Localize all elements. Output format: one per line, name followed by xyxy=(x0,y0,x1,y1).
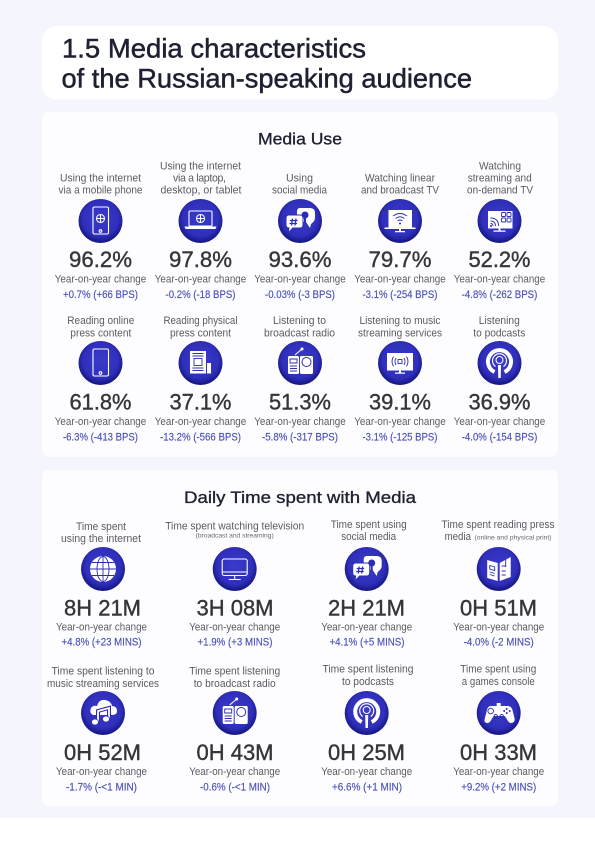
label: Reading online xyxy=(67,315,134,327)
value: 0H 43M xyxy=(196,740,274,765)
year-on-year label: Year-on-year change xyxy=(354,416,446,428)
stat: podcasts xyxy=(454,315,545,444)
change: +9.2% (+2 MINS) xyxy=(461,782,536,794)
icon: chat bubbles xyxy=(278,199,322,243)
value: 3H 08M xyxy=(196,595,274,620)
label xyxy=(264,315,335,340)
stat: laptop internet xyxy=(155,160,246,301)
label: streaming services xyxy=(358,328,442,340)
label: on-demand TV xyxy=(467,184,534,196)
label: Using the internet xyxy=(60,172,141,184)
year-on-year label: Year-on-year change xyxy=(55,274,146,286)
label xyxy=(160,160,242,196)
year-on-year label: Year-on-year change xyxy=(189,622,280,634)
label: Time spent using xyxy=(460,664,536,676)
label: Time spent listening xyxy=(322,664,414,676)
icon: radio xyxy=(213,691,257,735)
label: to podcasts xyxy=(342,676,394,688)
label xyxy=(61,521,141,545)
icon: podcast xyxy=(478,341,522,385)
label: Time spent xyxy=(76,521,126,533)
label xyxy=(331,519,407,543)
label xyxy=(58,172,143,196)
value: 51.3% xyxy=(269,390,331,414)
year-on-year label: Year-on-year change xyxy=(254,274,346,286)
year-on-year label: Year-on-year change xyxy=(321,766,412,778)
panel: daily time spent xyxy=(42,470,558,806)
label: Using the internet xyxy=(160,160,241,172)
change: -4.0% (-2 MINS) xyxy=(464,637,534,649)
value: 0H 51M xyxy=(460,595,537,620)
label xyxy=(272,172,327,196)
year-on-year label: Year-on-year change xyxy=(155,416,246,428)
year-on-year label: Year-on-year change xyxy=(354,274,446,286)
value: 93.6% xyxy=(268,247,332,272)
stat: time games console xyxy=(453,664,544,794)
label xyxy=(473,315,525,340)
label: broadcast radio xyxy=(264,328,335,340)
value: 61.8% xyxy=(70,390,132,414)
change: +0.7% (+66 BPS) xyxy=(63,289,138,301)
change: -5.8% (-317 BPS) xyxy=(262,432,338,444)
stat: time using internet xyxy=(56,521,147,649)
value: 52.2% xyxy=(468,247,530,272)
label: via a laptop, xyxy=(173,172,226,184)
value: 8H 21M xyxy=(64,595,141,620)
year-on-year label: Year-on-year change xyxy=(453,766,544,778)
label: Watching linear xyxy=(365,172,435,184)
icon: gamepad xyxy=(477,691,521,735)
label xyxy=(47,666,159,690)
heading: daily time spent: Daily Time spent with Media xyxy=(184,488,417,507)
label: streaming and xyxy=(468,172,532,184)
label: Using xyxy=(286,172,313,184)
year-on-year label: Year-on-year change xyxy=(155,274,246,286)
year-on-year label: Year-on-year change xyxy=(56,622,147,634)
label xyxy=(361,172,440,196)
label xyxy=(67,315,134,340)
label xyxy=(189,666,280,690)
heading: media use: Media Use xyxy=(258,130,342,149)
stat: time reading press xyxy=(442,519,554,649)
panel: media use xyxy=(42,112,558,457)
change: -0.6% (-<1 MIN) xyxy=(200,782,270,794)
icon: streaming tv xyxy=(478,199,522,243)
change: -13.2% (-566 BPS) xyxy=(160,432,241,444)
label: via a mobile phone xyxy=(58,184,143,196)
change: -0.2% (-18 BPS) xyxy=(166,289,236,301)
stat: linear tv xyxy=(354,172,446,301)
value: 0H 25M xyxy=(328,740,405,765)
icon: tv with wifi xyxy=(378,199,422,243)
stat: time watching television xyxy=(165,520,304,649)
stat: online press xyxy=(55,315,146,444)
icon: newspaper xyxy=(178,341,222,385)
value: 36.9% xyxy=(468,390,530,414)
title xyxy=(62,34,472,94)
icon: phone xyxy=(78,341,122,385)
label: Time spent reading press xyxy=(442,519,554,531)
stat: broadcast radio xyxy=(254,315,346,444)
label: Reading physical xyxy=(164,315,238,327)
label: a games console xyxy=(462,676,535,688)
change: -6.3% (-413 BPS) xyxy=(63,432,138,444)
icon: globe xyxy=(81,547,125,591)
value: 2H 21M xyxy=(328,595,405,620)
label: music streaming services xyxy=(47,678,159,690)
label xyxy=(460,664,536,688)
value: 79.7% xyxy=(368,247,432,272)
change: -1.7% (-<1 MIN) xyxy=(66,782,137,794)
label: press content xyxy=(70,328,131,340)
label: to broadcast radio xyxy=(194,678,276,690)
year-on-year label: Year-on-year change xyxy=(454,416,545,428)
value: 0H 33M xyxy=(460,740,537,765)
year-on-year label: Year-on-year change xyxy=(56,766,147,778)
label: Time spent listening xyxy=(189,666,280,678)
label xyxy=(165,520,304,540)
label: using the internet xyxy=(61,533,141,545)
title: 1.5 Media characteristics xyxy=(62,34,366,64)
label: Watching xyxy=(479,160,521,172)
label: Listening to music xyxy=(360,315,441,327)
label: social media xyxy=(341,531,396,543)
label: Time spent using xyxy=(331,519,407,531)
label xyxy=(467,160,534,196)
label: press content xyxy=(170,328,231,340)
change: -4.8% (-262 BPS) xyxy=(462,289,537,301)
icon: laptop with globe xyxy=(178,199,222,243)
label: desktop, or tablet xyxy=(160,184,242,196)
icon: open book xyxy=(477,547,521,591)
value: 39.1% xyxy=(369,390,431,414)
label xyxy=(164,315,238,340)
icon: monitor xyxy=(213,547,257,591)
label: media xyxy=(445,531,471,543)
change: +1.9% (+3 MINS) xyxy=(198,637,272,649)
stat: streaming tv xyxy=(454,160,545,301)
change: +4.1% (+5 MINS) xyxy=(330,637,404,649)
label: Time spent watching television xyxy=(165,520,304,532)
year-on-year label: Year-on-year change xyxy=(55,416,146,428)
stat: mobile internet xyxy=(55,172,146,301)
label: and broadcast TV xyxy=(361,184,440,196)
year-on-year label: Year-on-year change xyxy=(454,274,545,286)
label: Listening to xyxy=(273,315,326,327)
change: -0.03% (-3 BPS) xyxy=(265,289,335,301)
icon: radio xyxy=(278,341,322,385)
stat: time using social media xyxy=(321,519,412,649)
label: Time spent listening to xyxy=(52,666,155,678)
value: 97.8% xyxy=(169,247,232,272)
stat: music streaming xyxy=(354,315,446,444)
stat: physical press xyxy=(155,315,246,444)
label: (broadcast and streaming) xyxy=(196,534,274,540)
icon: chat bubbles xyxy=(345,547,389,591)
icon: podcast xyxy=(345,691,389,735)
label: (online and physical print) xyxy=(474,536,552,542)
change: -3.1% (-125 BPS) xyxy=(362,432,438,444)
title panel xyxy=(42,26,558,100)
year-on-year label: Year-on-year change xyxy=(453,622,544,634)
label: social media xyxy=(272,184,327,196)
icon: music cloud xyxy=(81,691,125,735)
stat: social media xyxy=(254,172,346,301)
value: 37.1% xyxy=(170,390,232,414)
change: -4.0% (-154 BPS) xyxy=(462,432,537,444)
label: to podcasts xyxy=(473,328,525,340)
icon: screen with broadcast signal xyxy=(378,341,422,385)
label xyxy=(358,315,442,340)
year-on-year label: Year-on-year change xyxy=(254,416,346,428)
year-on-year label: Year-on-year change xyxy=(321,622,412,634)
label xyxy=(322,664,414,688)
change: +6.6% (+1 MIN) xyxy=(332,782,402,794)
icon: mobile phone with globe xyxy=(78,199,122,243)
year-on-year label: Year-on-year change xyxy=(189,766,280,778)
change: +4.8% (+23 MINS) xyxy=(62,637,142,649)
value: 96.2% xyxy=(69,247,132,272)
stat: time music streaming xyxy=(47,666,159,794)
title: of the Russian-speaking audience xyxy=(62,64,472,94)
stat: time podcasts xyxy=(321,664,414,794)
value: 0H 52M xyxy=(64,740,141,765)
change: -3.1% (-254 BPS) xyxy=(362,289,438,301)
label xyxy=(442,519,554,543)
label: Listening xyxy=(479,315,520,327)
stat: time broadcast radio xyxy=(189,666,280,794)
